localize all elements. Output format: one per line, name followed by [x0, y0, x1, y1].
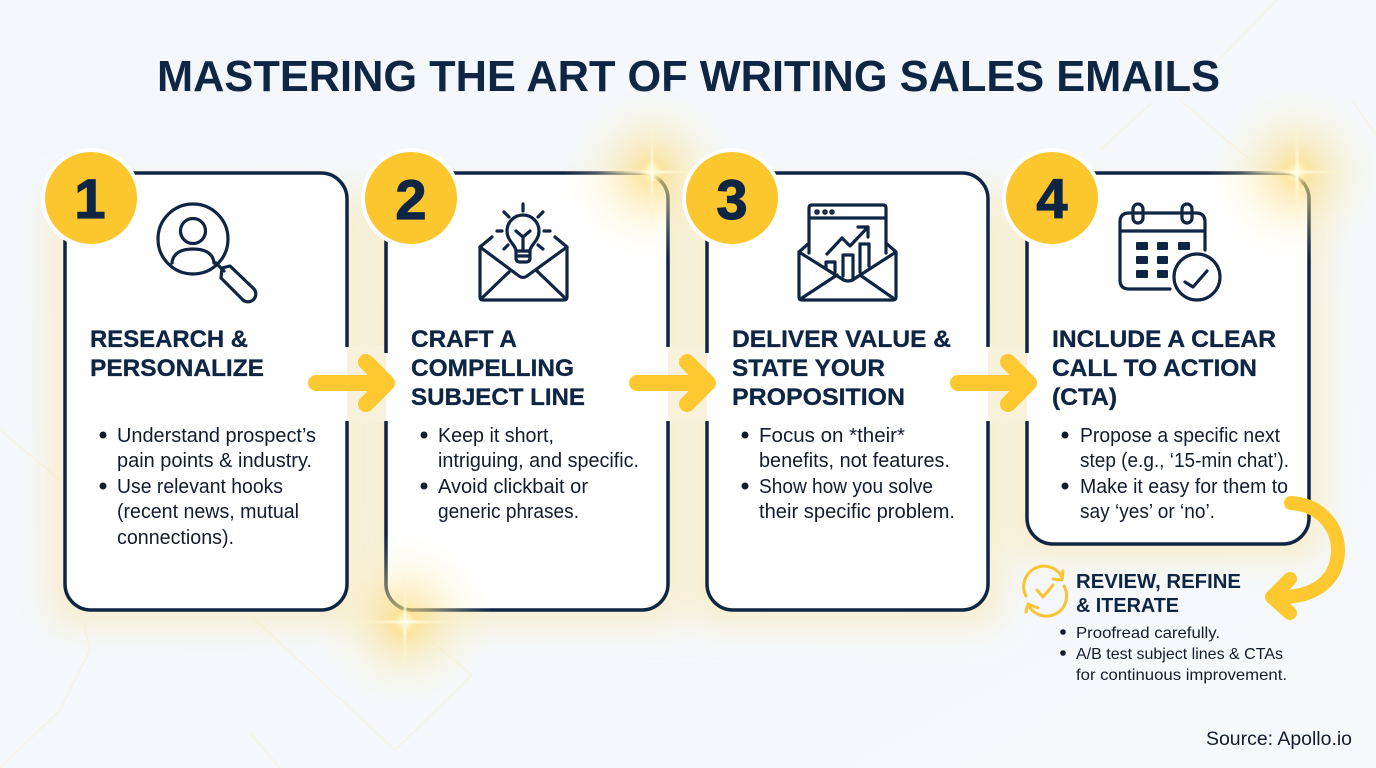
- heading 4: CALL TO ACTION: [1052, 355, 1257, 382]
- heading 3: [732, 326, 951, 411]
- source: Source: Apollo.io: [1206, 729, 1352, 750]
- card 3 frame: [707, 173, 988, 610]
- bullet list 2: Keep it short,: [438, 425, 554, 447]
- review bullet list: for continuous improvement.: [1076, 667, 1287, 684]
- bullet list 2: generic phrases.: [438, 501, 579, 523]
- heading 2: SUBJECT LINE: [411, 384, 585, 411]
- heading 4: (CTA): [1052, 384, 1117, 411]
- icon: envelope with chart: [799, 205, 896, 300]
- number badge 4: 4: [1036, 167, 1068, 230]
- card 2 frame: [386, 173, 668, 610]
- number badge 4: [1002, 148, 1102, 248]
- panel: step 1 research: [41, 148, 347, 610]
- heading 2: COMPELLING: [411, 355, 574, 382]
- heading 4: [1052, 326, 1276, 411]
- icon: envelope with lightbulb: [480, 204, 567, 300]
- arrow: step 1 to 2: [316, 362, 387, 404]
- arrow: step 2 to 3: [637, 362, 708, 404]
- title: MASTERING THE ART OF WRITING SALES EMAILS: [157, 53, 1220, 101]
- heading 1: [90, 326, 264, 382]
- number badge 3: 3: [716, 168, 748, 231]
- bullet list 3: Show how you solve: [759, 476, 933, 498]
- bullet list 3: benefits, not features.: [759, 450, 950, 472]
- arrow gap bands: [347, 345, 1027, 423]
- icon: calendar with check: [1120, 204, 1220, 300]
- card glows: [52, 190, 1321, 624]
- bullet list 4: step (e.g., ‘15-min chat’).: [1080, 450, 1289, 472]
- review heading: [1076, 571, 1241, 617]
- bullet list 1: Understand prospect’s: [117, 425, 316, 447]
- icon: magnifier over person: [158, 204, 256, 302]
- heading 3: DELIVER VALUE &: [732, 326, 951, 353]
- bullet list 1: connections).: [117, 527, 234, 549]
- bullet list 3: [742, 425, 955, 523]
- icon: refresh with check: [1024, 566, 1067, 616]
- sparkle on card 4: [1209, 84, 1376, 260]
- card 4 frame: [1027, 173, 1309, 544]
- bullet list 2: Avoid clickbait or: [438, 476, 588, 498]
- number badge 2: [361, 148, 461, 248]
- review bullet list: [1060, 625, 1287, 684]
- bullet list 1: Use relevant hooks: [117, 476, 283, 498]
- heading 3: STATE YOUR: [732, 355, 885, 382]
- bullet list 4: [1062, 425, 1289, 523]
- heading 1: PERSONALIZE: [90, 355, 264, 382]
- bullet list 4: Make it easy for them to: [1080, 476, 1288, 498]
- number badge 1: [41, 148, 141, 248]
- number badge 1: 1: [74, 167, 106, 230]
- calendar date squares: [1136, 242, 1190, 278]
- number badge 2: 2: [395, 168, 427, 231]
- heading 2: [411, 326, 585, 411]
- number badge 3: [682, 148, 782, 248]
- bullet list 1: pain points & industry.: [117, 450, 312, 472]
- bullet list 1: [100, 425, 316, 549]
- bullet list 3: their specific problem.: [759, 501, 955, 523]
- bullet list 2: [420, 425, 639, 523]
- heading 4: INCLUDE A CLEAR: [1052, 326, 1276, 353]
- arrow: step 3 to 4: [958, 362, 1029, 404]
- curved arrow: step 4 to review: [1272, 503, 1338, 613]
- panel: review refine iterate: [1024, 566, 1287, 684]
- review bullet list: Proofread carefully.: [1076, 625, 1220, 642]
- bullet list 4: say ‘yes’ or ‘no’.: [1080, 501, 1215, 523]
- heading 2: CRAFT A: [411, 326, 517, 353]
- review heading: REVIEW, REFINE: [1076, 571, 1241, 593]
- panel: step 2 subject line: [386, 173, 668, 610]
- heading 1: RESEARCH &: [90, 326, 248, 353]
- panel: step 4 call to action: [1002, 148, 1309, 544]
- panel: step 3 value: [682, 148, 988, 610]
- bullet list 4: Propose a specific next: [1080, 425, 1280, 447]
- review bullet list: A/B test subject lines & CTAs: [1076, 646, 1283, 663]
- sparkles on card 2: [317, 84, 740, 710]
- bullet list 2: intriguing, and specific.: [438, 450, 639, 472]
- bullet list 1: (recent news, mutual: [117, 501, 299, 523]
- heading 3: PROPOSITION: [732, 384, 905, 411]
- bullet list 3: Focus on *their*: [759, 425, 905, 447]
- review heading: & ITERATE: [1076, 595, 1179, 617]
- card 1 frame: [65, 173, 347, 610]
